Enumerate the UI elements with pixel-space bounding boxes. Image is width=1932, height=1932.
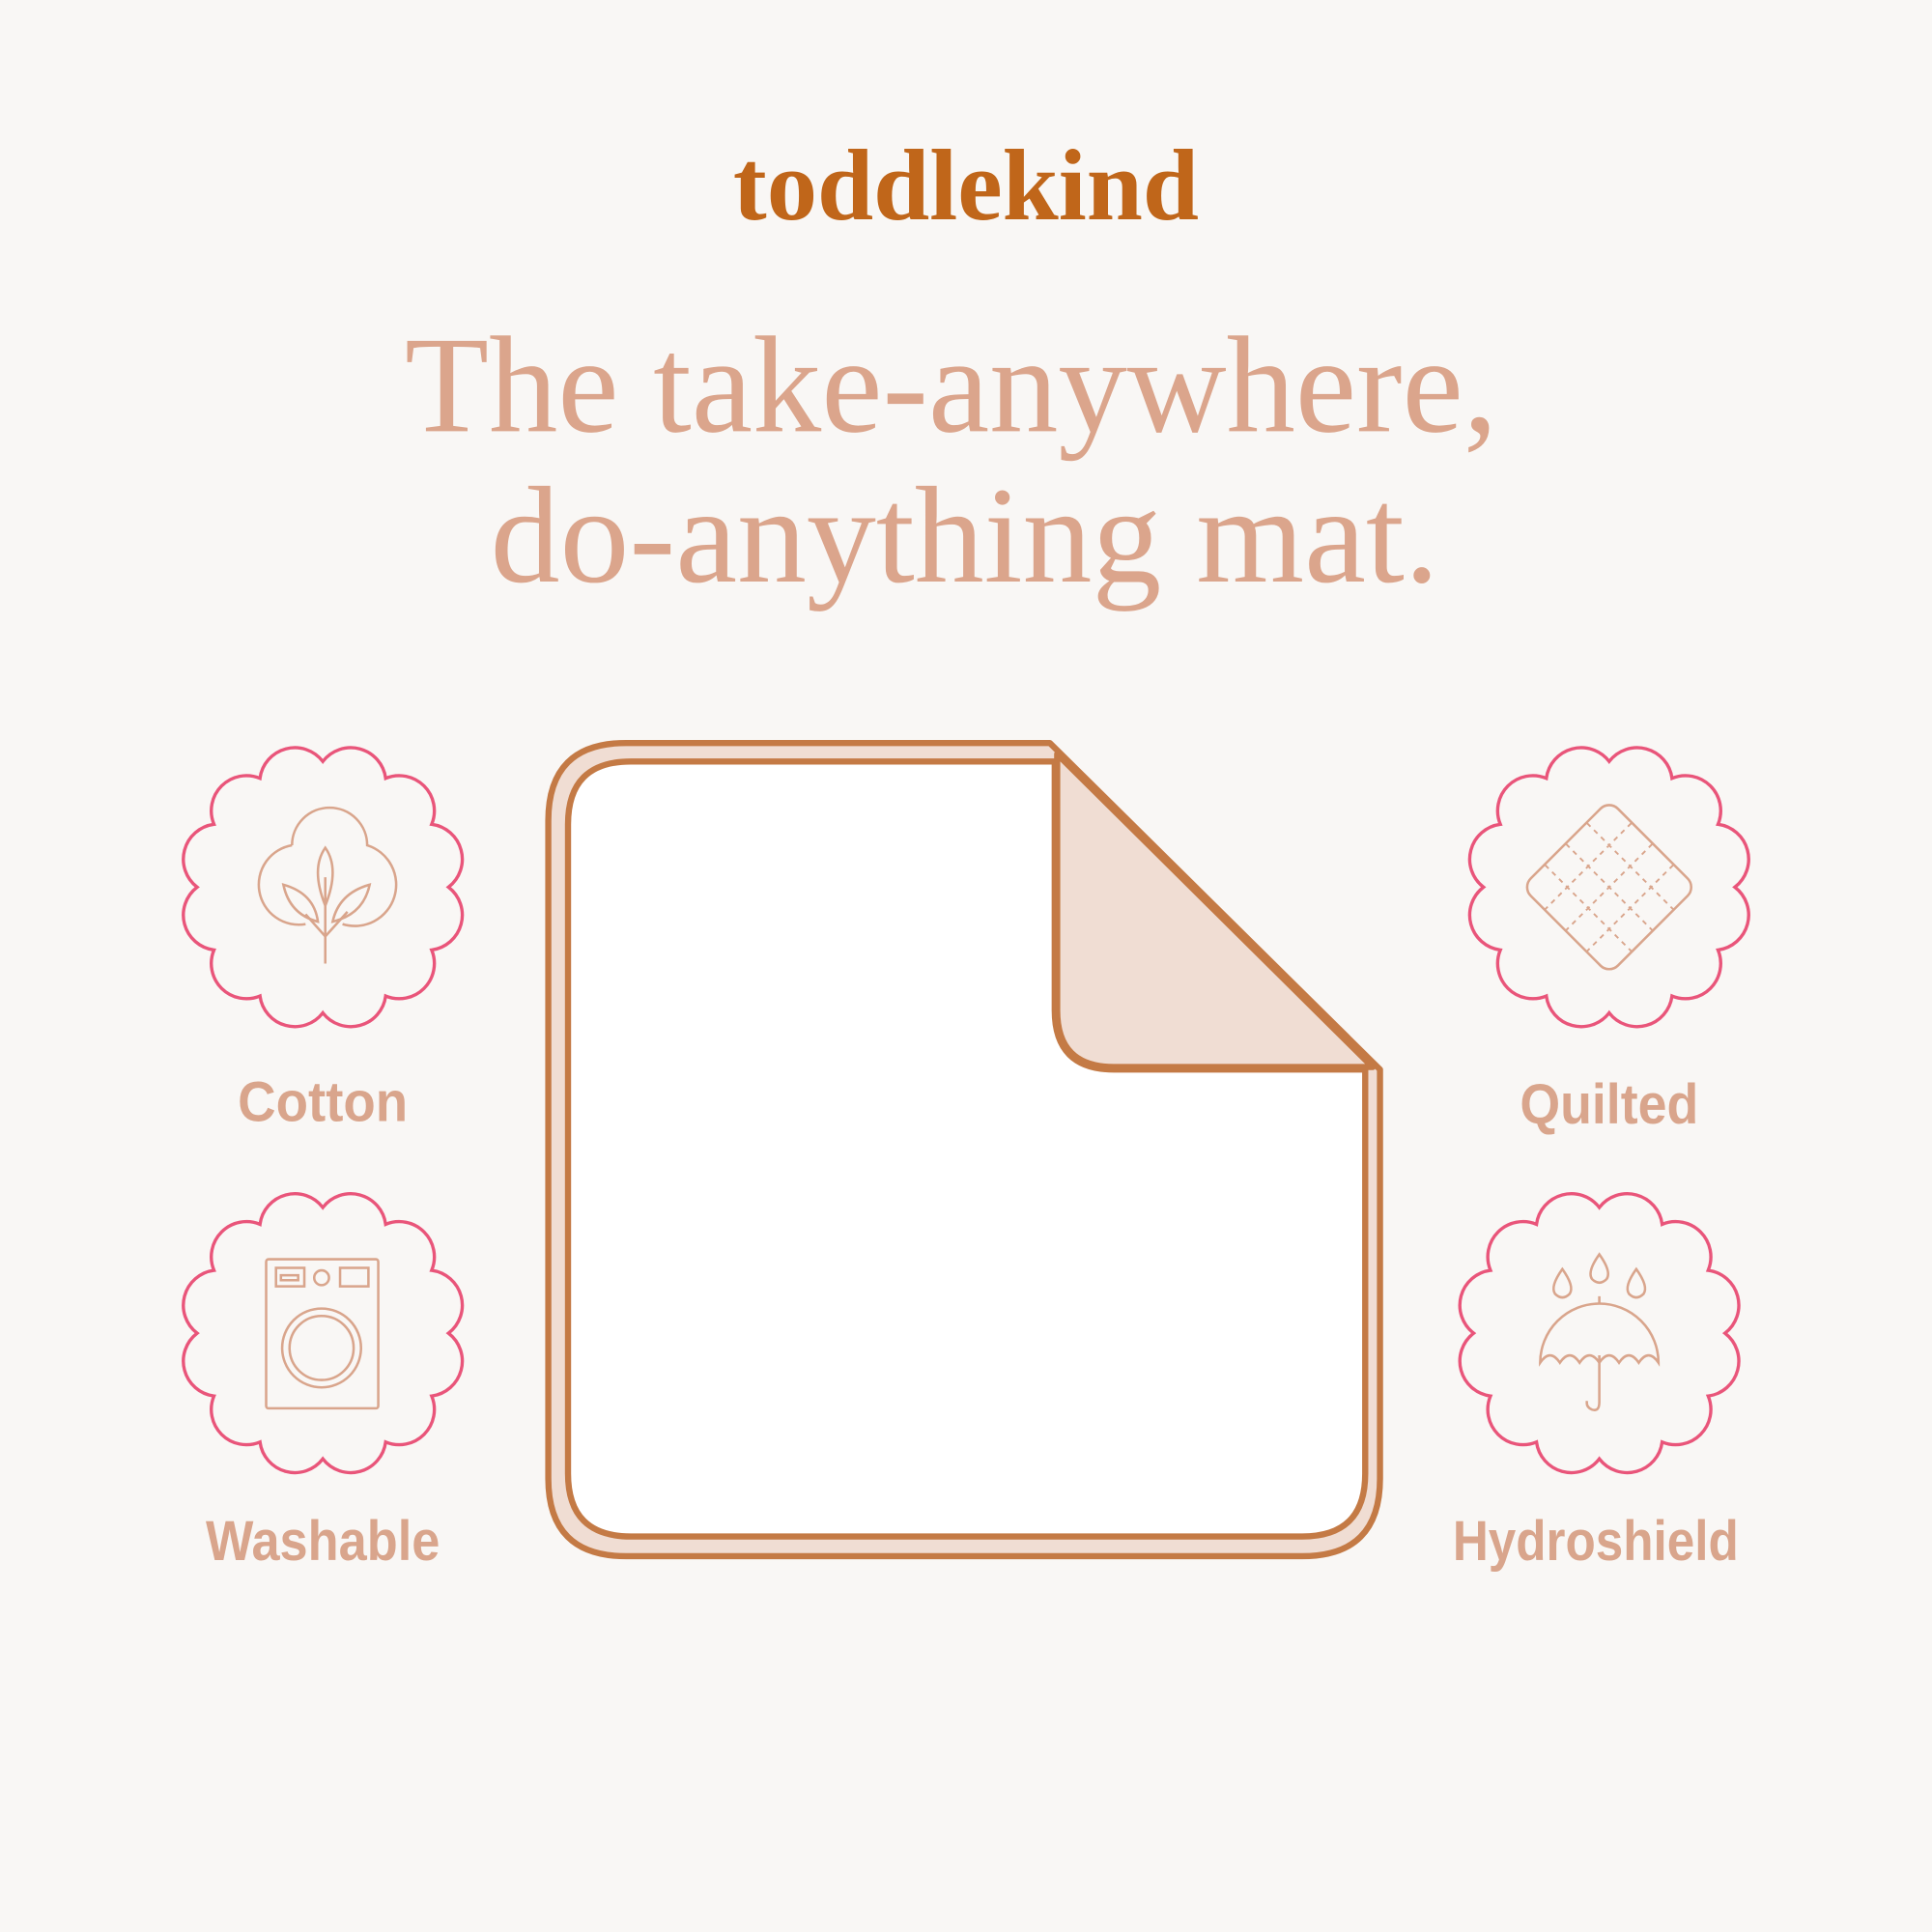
icon: umbrella with rain (1540, 1254, 1659, 1410)
headline (405, 308, 1497, 611)
label: cotton: Cotton (238, 1071, 408, 1134)
label: washable: Washable (206, 1510, 440, 1573)
feature: washable (184, 1194, 463, 1573)
headline: The take-anywhere, (405, 308, 1497, 461)
icon: cotton plant (259, 808, 396, 963)
logo: toddlekind (733, 129, 1199, 242)
icon: quilted square (1522, 800, 1696, 975)
label: quilted: Quilted (1520, 1073, 1698, 1136)
headline: do-anything mat. (491, 459, 1439, 611)
feature: cotton (184, 748, 463, 1134)
label: hydroshield: Hydroshield (1453, 1510, 1739, 1573)
feature: quilted (1469, 748, 1748, 1136)
mat illustration (549, 743, 1380, 1556)
feature: hydroshield (1453, 1194, 1739, 1573)
icon: washing machine (267, 1260, 379, 1408)
